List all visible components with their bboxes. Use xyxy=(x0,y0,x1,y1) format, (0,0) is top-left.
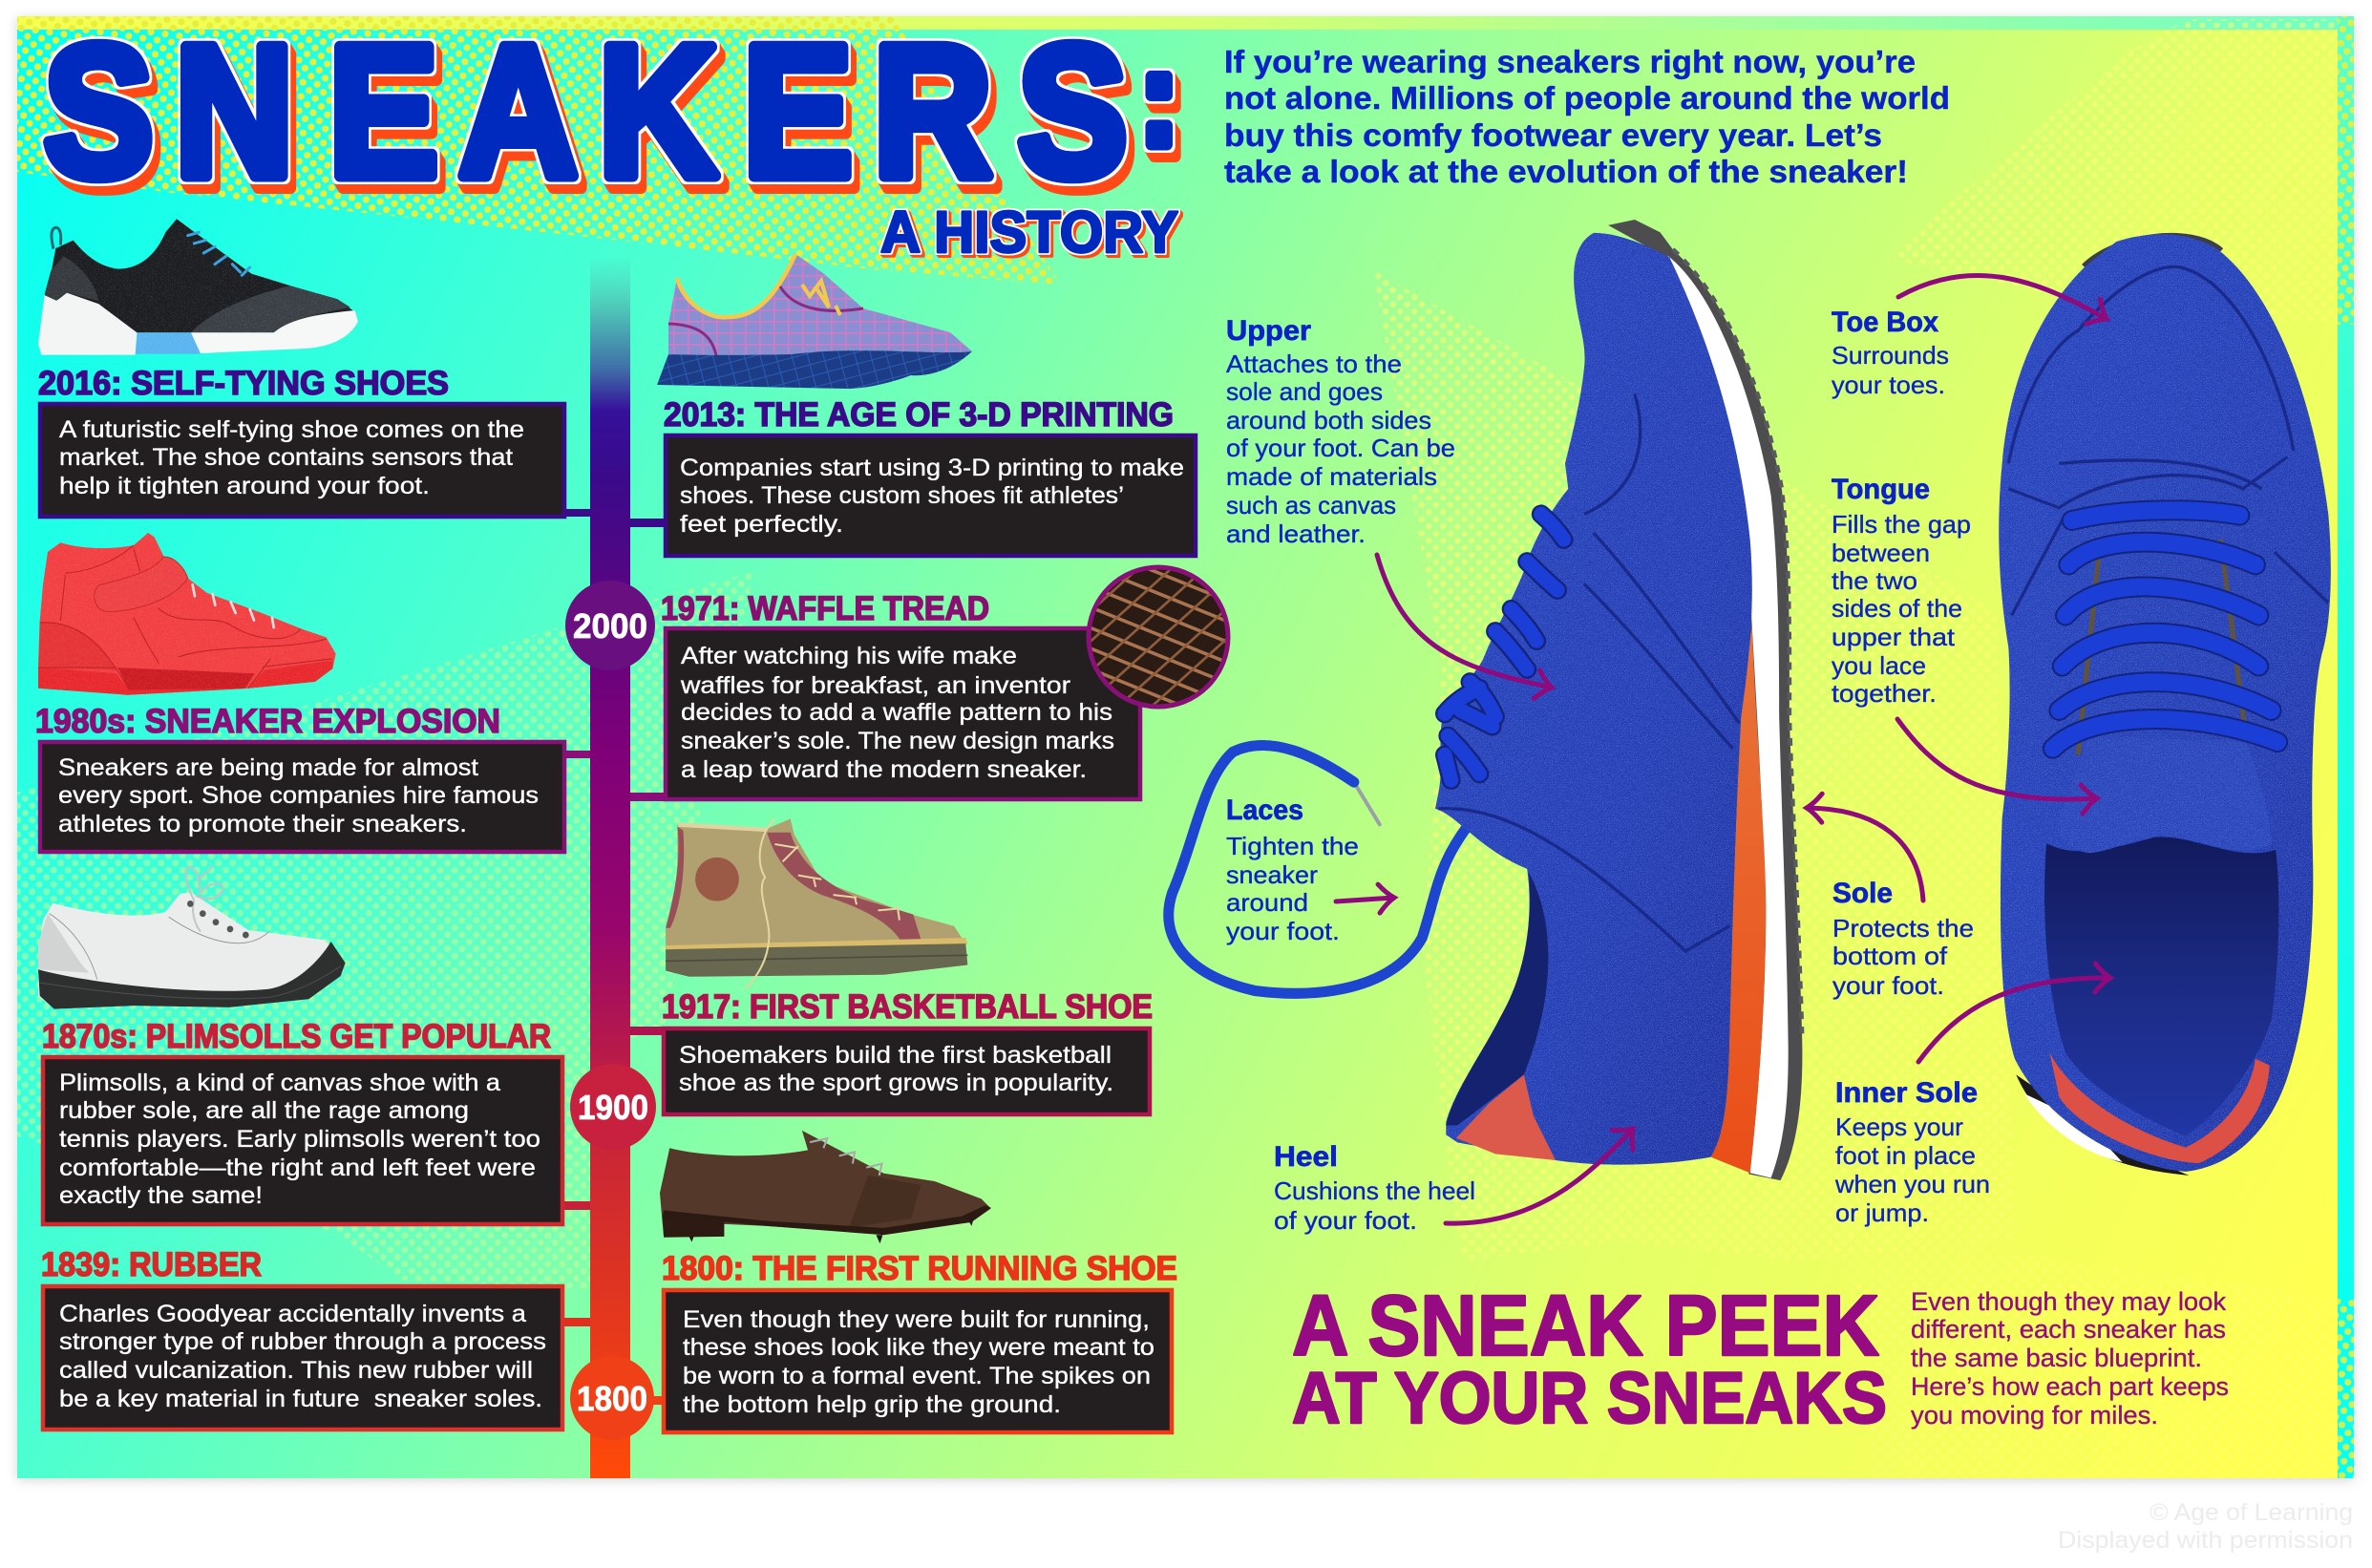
label: tongue: Tongue xyxy=(1832,474,1930,505)
text: sneak peek intro: you moving for miles. xyxy=(1911,1401,2158,1430)
heading 1800: 1800: THE FIRST RUNNING SHOE xyxy=(662,1250,1177,1287)
label: inner sole: when you run xyxy=(1834,1170,1990,1198)
watermark: Displayed with permission xyxy=(2058,1527,2353,1554)
label: sole: Sole xyxy=(1832,878,1893,909)
label: upper: sole and goes xyxy=(1226,377,1383,406)
arrow: inner sole xyxy=(1918,978,2110,1062)
panel: 1839 rubber xyxy=(41,1246,562,1430)
panel: 1917 basketball xyxy=(662,988,1153,1114)
top laces xyxy=(2053,510,2277,749)
outsole xyxy=(1608,220,1802,1180)
body 1971: waffles for breakfast, an inventor xyxy=(680,672,1070,699)
heading 2016: 2016: SELF-TYING SHOES xyxy=(38,365,449,402)
body 1971: After watching his wife make xyxy=(681,643,1017,669)
text: sneak peek intro: the same basic blueprint. xyxy=(1911,1344,2202,1372)
intro text: If you’re wearing sneakers right now, you’re xyxy=(1224,44,1916,79)
intro text: take a look at the evolution of the sneaker! xyxy=(1224,154,1908,189)
arrow: toe box xyxy=(1898,275,2107,319)
body 1980s: athletes to promote their sneakers. xyxy=(58,811,467,837)
label: tongue xyxy=(1832,474,1971,708)
body 1980s: Sneakers are being made for almost xyxy=(58,754,478,781)
label: toe box: Surrounds xyxy=(1832,341,1949,370)
body 1917: Shoemakers build the first basketball xyxy=(679,1042,1112,1069)
label: laces: Tighten the xyxy=(1226,832,1359,860)
label: sole: bottom of xyxy=(1832,942,1948,970)
body 2016 xyxy=(59,416,524,499)
label: toe box xyxy=(1832,307,1949,399)
label: heel xyxy=(1274,1141,1475,1235)
label: inner sole: Keeps your xyxy=(1835,1112,1963,1141)
timeline marker 2000: 2000 xyxy=(573,606,647,646)
timeline marker 1900: 1900 xyxy=(578,1088,648,1127)
arrow: laces xyxy=(1336,898,1394,901)
label: inner sole: or jump. xyxy=(1835,1198,1929,1227)
heading 2013: 2013: THE AGE OF 3-D PRINTING xyxy=(664,396,1174,434)
text: sneak peek intro: different, each sneaker has xyxy=(1911,1315,2226,1344)
body 1800: the bottom help grip the ground. xyxy=(683,1391,1061,1418)
title: SNEAKERS:: SNEAKERS xyxy=(44,8,1128,216)
label: upper: made of materials xyxy=(1226,462,1437,491)
toe outsole xyxy=(2085,237,2221,267)
label: tongue: the two xyxy=(1832,566,1917,595)
label: laces: Laces xyxy=(1226,795,1303,826)
heading: a sneak peek at your sneaks: A SNEAK PEEK xyxy=(1292,1279,1879,1374)
heading: a sneak peek at your sneaks xyxy=(1292,1279,1887,1439)
label: heel: of your foot. xyxy=(1274,1206,1417,1235)
lace slits xyxy=(2078,540,2246,754)
timeline marker 1900 xyxy=(570,1064,656,1150)
label: inner sole: foot in place xyxy=(1835,1141,1976,1170)
watermark: © Age of Learning xyxy=(2150,1499,2353,1526)
box 2016 xyxy=(40,404,564,517)
shoe: 1800 running xyxy=(660,1131,991,1243)
label: upper: Upper xyxy=(1226,315,1311,347)
body 2013: feet perfectly. xyxy=(680,511,843,538)
timeline marker 1800 xyxy=(570,1356,654,1440)
label: upper: around both sides xyxy=(1226,406,1431,434)
arrow: tongue xyxy=(1897,719,2097,799)
body 1870s: comfortable—the right and left feet were xyxy=(59,1155,536,1181)
label: inner sole xyxy=(1834,1077,1990,1227)
panel: 1870s plimsolls xyxy=(42,1018,562,1224)
upper fabric top xyxy=(1999,234,2331,1172)
side laces xyxy=(1445,514,1564,780)
shoe: 1980s red xyxy=(38,533,336,695)
body 1800: these shoes look like they were meant to xyxy=(683,1334,1154,1361)
label: upper: and leather. xyxy=(1226,519,1366,548)
timeline marker 1800: 1800 xyxy=(577,1379,647,1418)
body 1839: Charles Goodyear accidentally invents a xyxy=(59,1301,526,1327)
white midsole xyxy=(1667,256,1789,1178)
box 1839 xyxy=(43,1286,562,1430)
body 1839: be a key material in future sneaker soles. xyxy=(59,1386,542,1412)
body 1870s: Plimsolls, a kind of canvas shoe with a xyxy=(59,1070,500,1096)
body 2013: Companies start using 3-D printing to make xyxy=(680,455,1184,481)
text: sneak peek intro: Here’s how each part keeps xyxy=(1911,1372,2229,1401)
red heel counter xyxy=(2049,1052,2270,1163)
body 1870s: rubber sole, are all the rage among xyxy=(59,1097,469,1124)
text: sneak peek intro xyxy=(1911,1287,2229,1430)
inner sole xyxy=(2044,837,2278,1136)
label: upper: of your foot. Can be xyxy=(1226,434,1455,462)
body 1800: be worn to a formal event. The spikes on xyxy=(683,1363,1151,1389)
panel: 1971 waffle tread xyxy=(661,567,1228,799)
body 1917 xyxy=(679,1042,1113,1096)
body 1870s: tennis players. Early plimsolls weren’t too xyxy=(59,1126,540,1153)
upper fabric xyxy=(1435,233,1752,1165)
body 1800: Even though they were built for running, xyxy=(683,1306,1150,1333)
label: sole xyxy=(1832,878,1974,1000)
heading: a sneak peek at your sneaks: AT YOUR SNEAKS xyxy=(1292,1358,1887,1439)
panel: 1800 running xyxy=(662,1250,1177,1432)
label: tongue: upper that xyxy=(1832,623,1956,651)
big shoe: side view xyxy=(1435,220,1802,1180)
heading 1870s: 1870s: PLIMSOLLS GET POPULAR xyxy=(42,1018,551,1055)
label: heel: Heel xyxy=(1274,1141,1338,1173)
heading 1839: 1839: RUBBER xyxy=(41,1246,262,1283)
watermark xyxy=(2058,1499,2353,1554)
shoe: 1917 basketball xyxy=(666,819,967,988)
box 1870s xyxy=(43,1057,562,1224)
heading 1917: 1917: FIRST BASKETBALL SHOE xyxy=(662,988,1153,1026)
body 1870s: exactly the same! xyxy=(59,1182,263,1209)
icon: waffle tread circle xyxy=(1089,567,1228,707)
body 1971: sneaker’s sole. The new design marks xyxy=(681,728,1114,754)
label: sole: your foot. xyxy=(1832,971,1944,1000)
shoe: 1870s white plimsoll xyxy=(38,866,346,1009)
label: tongue: together. xyxy=(1832,679,1937,708)
tongue xyxy=(2056,736,2272,853)
label: heel: Cushions the heel xyxy=(1274,1176,1475,1205)
label: upper: Attaches to the xyxy=(1226,350,1402,378)
label: toe box: Toe Box xyxy=(1832,307,1938,338)
box 1971 xyxy=(666,628,1140,799)
label: inner sole: Inner Sole xyxy=(1835,1077,1978,1109)
body 1917: shoe as the sport grows in popularity. xyxy=(679,1070,1113,1096)
title: SNEAKERS:: : xyxy=(1139,24,1178,173)
intro text: buy this comfy footwear every year. Let’s xyxy=(1224,117,1882,153)
panel: 1980s sneaker explosion xyxy=(35,703,564,852)
body 1800 xyxy=(683,1306,1154,1418)
collar interior xyxy=(1446,872,1548,1125)
label: laces: your foot. xyxy=(1226,917,1340,945)
label: laces: sneaker xyxy=(1226,860,1318,889)
shoelace xyxy=(1169,745,1475,993)
body 1980s: every sport. Shoe companies hire famous xyxy=(58,782,539,809)
intro text xyxy=(1224,44,1950,189)
subtitle: A HISTORY: A HISTORY xyxy=(880,200,1178,265)
box 1980s xyxy=(40,742,564,852)
arrow: upper xyxy=(1377,555,1552,688)
shoe: 2016 self-tying xyxy=(38,219,358,355)
body 1971: decides to add a waffle pattern to his xyxy=(681,699,1112,726)
body 1839: called vulcanization. This new rubber will xyxy=(59,1357,533,1384)
label: tongue: sides of the xyxy=(1832,594,1962,623)
box 2013 xyxy=(666,435,1196,556)
text: sneak peek intro: Even though they may look xyxy=(1911,1287,2227,1316)
body 1980s xyxy=(58,754,539,837)
arrow: sole xyxy=(1807,808,1923,901)
body 1839: stronger type of rubber through a process xyxy=(59,1328,546,1355)
panel: 2016 self-tying shoes xyxy=(38,365,564,517)
intro text: not alone. Millions of people around the world xyxy=(1224,80,1950,116)
body 1870s xyxy=(59,1070,540,1209)
orange midsole xyxy=(1711,625,1766,1173)
label: toe box: your toes. xyxy=(1832,371,1945,399)
arrow: heel xyxy=(1446,1129,1633,1223)
body 1971 xyxy=(680,643,1114,783)
label: tongue: you lace xyxy=(1832,651,1926,680)
heel outsole xyxy=(2016,1074,2189,1176)
label: sole: Protects the xyxy=(1832,914,1974,943)
label: upper: such as canvas xyxy=(1226,491,1396,519)
heading 1980s: 1980s: SNEAKER EXPLOSION xyxy=(35,703,500,740)
label: laces xyxy=(1226,795,1359,945)
label: upper xyxy=(1226,315,1455,548)
big shoe: top view xyxy=(1999,234,2331,1176)
label: tongue: Fills the gap xyxy=(1832,510,1971,539)
body 2016: help it tighten around your foot. xyxy=(59,473,430,499)
body 2013 xyxy=(680,455,1184,538)
timeline bar xyxy=(564,259,664,1478)
body 1839 xyxy=(59,1301,546,1412)
box 1917 xyxy=(664,1028,1150,1114)
top laces shadow xyxy=(2053,510,2277,749)
body 2016: market. The shoe contains sensors that xyxy=(59,444,513,471)
panel: 2013 3-D printing xyxy=(664,396,1196,556)
body 2016: A futuristic self-tying shoe comes on the xyxy=(59,416,524,443)
box 1800 xyxy=(664,1290,1172,1432)
outsole teeth xyxy=(1673,249,1802,1033)
body 2013: shoes. These custom shoes fit athletes’ xyxy=(680,482,1124,509)
label: tongue: between xyxy=(1832,539,1930,567)
shoe: 2013 3-D printed xyxy=(657,254,972,389)
timeline marker 2000 xyxy=(565,581,655,670)
label: laces: around xyxy=(1226,888,1308,917)
heading 1971: 1971: WAFFLE TREAD xyxy=(661,590,989,627)
body 1971: a leap toward the modern sneaker. xyxy=(681,756,1087,783)
side laces shadow xyxy=(1445,514,1564,780)
heel patch xyxy=(1456,1074,1556,1160)
